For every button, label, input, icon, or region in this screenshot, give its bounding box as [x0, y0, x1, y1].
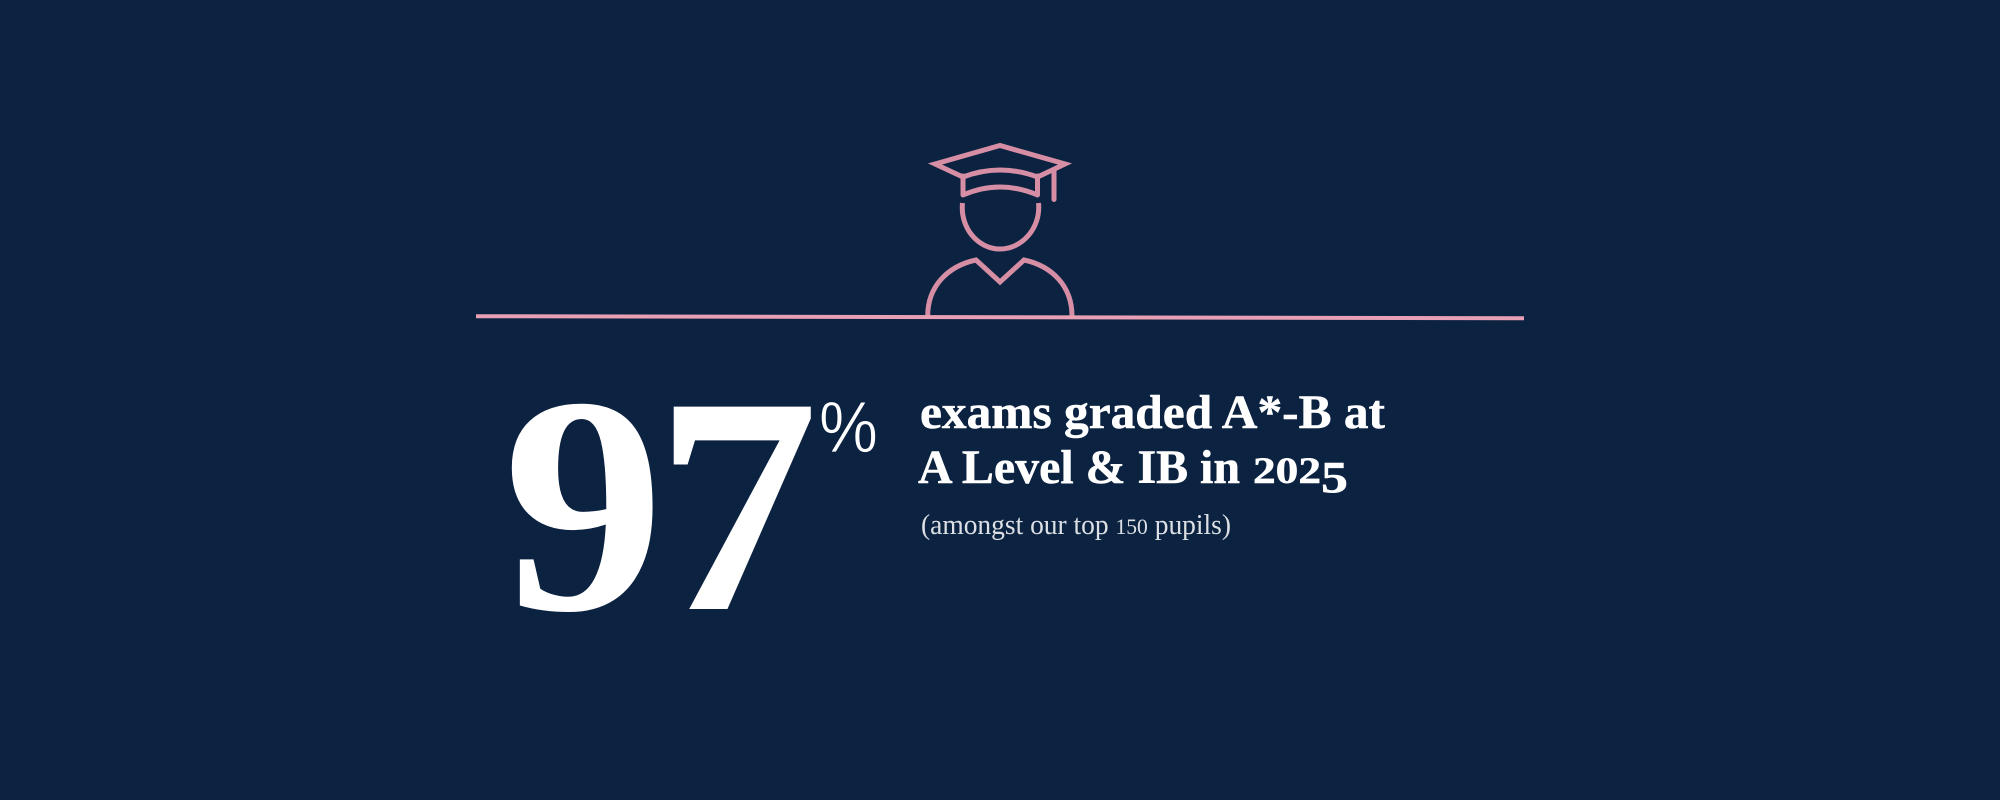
icon: shoulders	[928, 260, 1072, 316]
icon: mortarboard band	[963, 176, 1038, 195]
icon: tassel	[1052, 170, 1056, 200]
headline words: A Level & IB in	[918, 441, 1240, 494]
headline year: 5	[1321, 453, 1348, 502]
headline line 1: exams graded A*-B at	[920, 386, 1385, 439]
headline year: 202	[1253, 451, 1308, 492]
sub note: (amongst our top 150 pupils)	[921, 510, 1231, 541]
big number 97	[503, 333, 819, 677]
icon: head	[962, 203, 1039, 249]
digit 9: 9	[503, 334, 664, 677]
headline line 2	[918, 441, 1348, 502]
percent sign: %	[819, 386, 878, 468]
icon: mortarboard top	[935, 146, 1065, 177]
digit 7: 7	[655, 333, 819, 676]
divider line	[476, 316, 1524, 318]
icon: graduate with mortarboard	[928, 146, 1072, 316]
